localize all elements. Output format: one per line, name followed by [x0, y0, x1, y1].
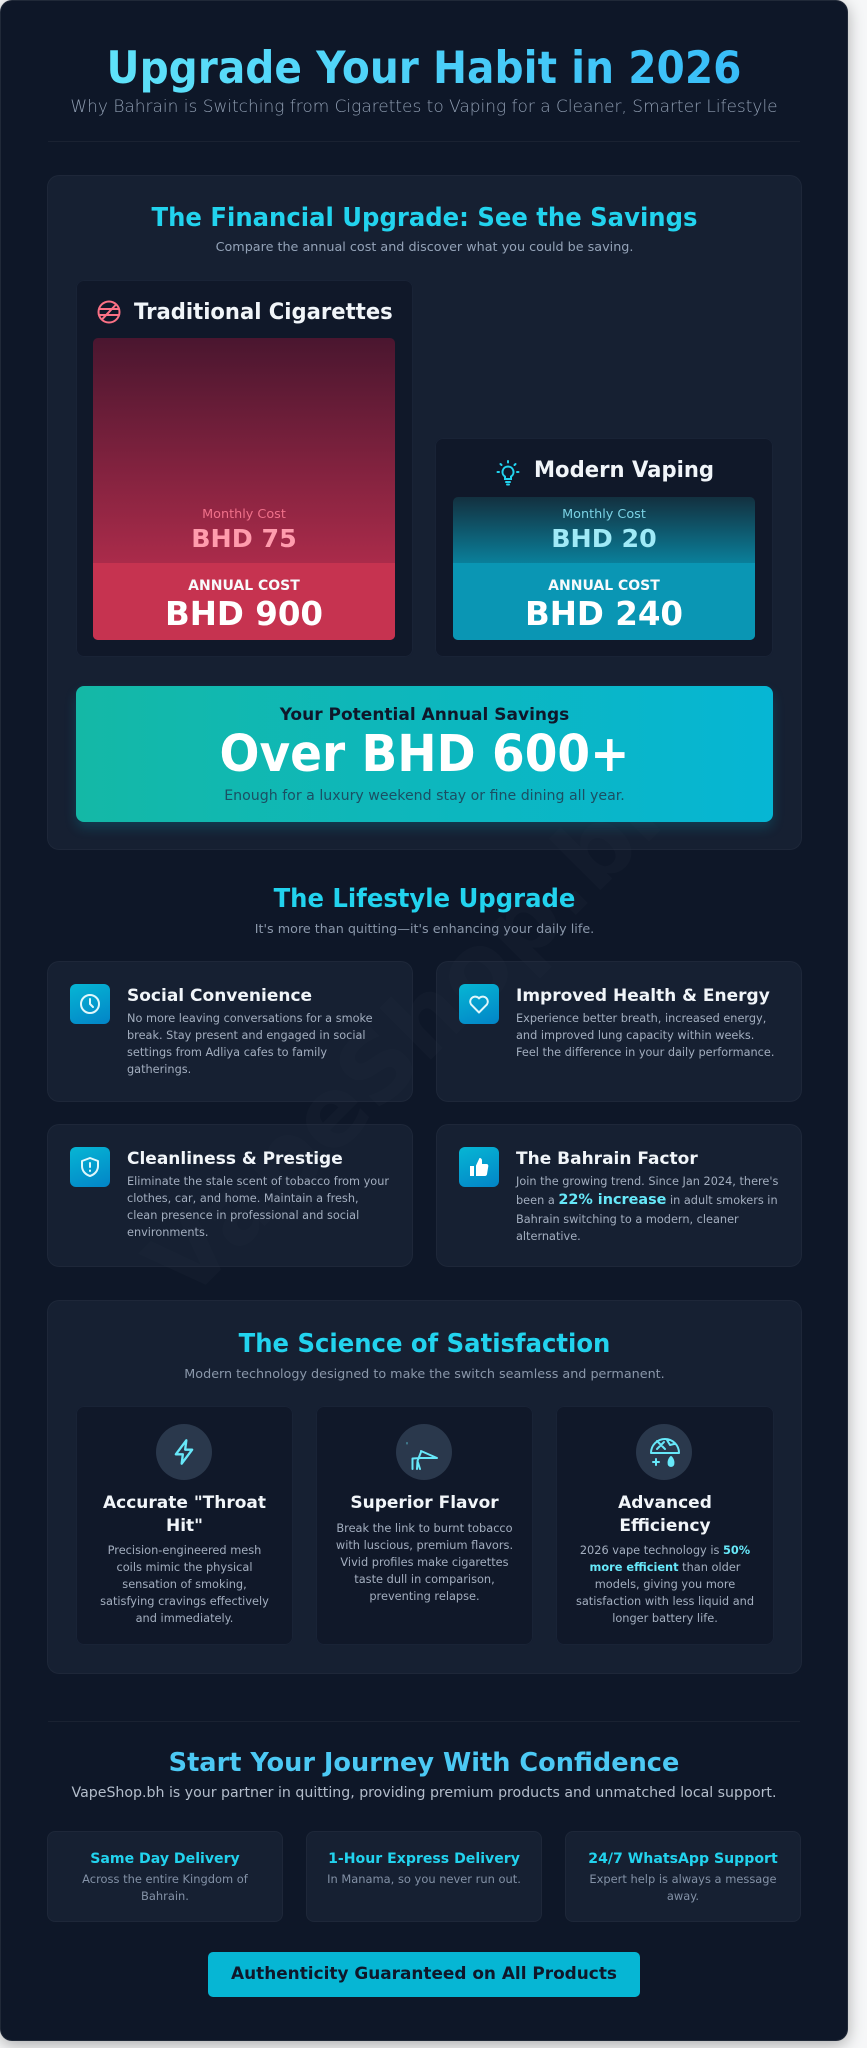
text: cleanliness: environments. — [127, 1226, 208, 1239]
annual cost: cigarettes: BHD 900 — [165, 595, 323, 633]
annual cost: vaping: BHD 240 — [525, 595, 683, 633]
savings amount: Over BHD 600+ — [220, 724, 629, 784]
science card: superior flavor — [316, 1406, 533, 1645]
feature: cleanliness — [47, 1124, 413, 1267]
text: throat hit: Precision-engineered mesh — [108, 1543, 261, 1557]
annual cost: vaping: ANNUAL COST — [548, 578, 660, 594]
icon: no smoking — [98, 300, 120, 324]
watermark: VapeShop.bh — [124, 736, 708, 1320]
text: improved health: Experience better breath, increased energy, — [516, 1012, 766, 1025]
service description — [82, 1872, 248, 1903]
heading: superior flavor: Superior Flavor — [350, 1493, 499, 1513]
button: authenticity guaranteed: Authenticity Guaranteed on All Products — [231, 1963, 617, 1983]
icon: clock — [70, 984, 110, 1024]
text: superior flavor — [336, 1521, 513, 1603]
service: express delivery — [306, 1831, 542, 1922]
service description: In Manama, so you never run out. — [327, 1872, 521, 1886]
text: bahrain factor: been a 22% increase in adult smokers in — [516, 1192, 778, 1208]
service description: Across the entire Kingdom of — [82, 1872, 248, 1886]
monthly cost: cigarettes — [191, 507, 297, 553]
text: cleanliness — [127, 1175, 389, 1239]
text: superior flavor: preventing relapse. — [369, 1589, 480, 1603]
section intro: financial: Compare the annual cost and discover what you could be saving. — [216, 240, 633, 255]
annual cost: cigarettes — [93, 563, 395, 640]
icon: heart — [459, 984, 499, 1024]
icon: shield — [70, 1147, 110, 1187]
header — [48, 40, 800, 142]
text: superior flavor: Break the link to burnt tobacco — [336, 1521, 513, 1535]
feature: social convenience — [47, 961, 413, 1102]
icon: flavor — [396, 1424, 452, 1480]
title: Upgrade Your Habit in 2026 — [107, 41, 741, 94]
comparison: traditional cigarettes — [76, 280, 413, 657]
comparison: modern vaping — [435, 438, 773, 657]
section heading: lifestyle: The Lifestyle Upgrade — [274, 884, 575, 914]
heading: modern vaping: Modern Vaping — [534, 457, 714, 483]
heading: improved health: Improved Health & Energy — [516, 986, 770, 1006]
section heading: science: The Science of Satisfaction — [239, 1329, 610, 1359]
text: advanced efficiency: longer battery life. — [612, 1611, 718, 1625]
text: cleanliness: clothes, car, and home. Maintain a fresh, — [127, 1192, 359, 1205]
text: social convenience — [127, 1012, 373, 1076]
heading: advanced efficiency — [618, 1493, 712, 1536]
text: superior flavor: taste dull in comparison, — [354, 1572, 495, 1586]
text: improved health — [516, 1012, 774, 1059]
text: advanced efficiency: 2026 vape technology is 50% — [580, 1543, 750, 1557]
text: superior flavor: with luscious, premium flavors. — [336, 1538, 513, 1552]
cta intro: VapeShop.bh is your partner in quitting, providing premium products and unmatched local support. — [72, 1785, 776, 1801]
icon: thumbs up — [459, 1147, 499, 1187]
service description: away. — [667, 1889, 699, 1903]
section heading: financial: The Financial Upgrade: See the Savings — [152, 203, 697, 233]
monthly cost: cigarettes: Monthly Cost — [202, 507, 286, 522]
cost bar: cigarettes — [93, 338, 395, 640]
text: social convenience: settings from Adliya cafes to family — [127, 1046, 327, 1059]
text: social convenience: gatherings. — [127, 1063, 191, 1076]
icon: lightning bolt — [156, 1424, 212, 1480]
text: improved health: Feel the difference in your daily performance. — [516, 1046, 774, 1059]
section intro: lifestyle: It's more than quitting—it's enhancing your daily life. — [255, 922, 594, 937]
heading: advanced efficiency: Advanced — [618, 1493, 712, 1513]
savings label: Your Potential Annual Savings — [280, 705, 569, 725]
heading: bahrain factor: The Bahrain Factor — [516, 1149, 698, 1169]
heading: throat hit — [103, 1493, 266, 1536]
service: same day delivery — [47, 1831, 283, 1922]
text: throat hit — [100, 1543, 269, 1625]
service description — [589, 1872, 777, 1903]
heading: social convenience: Social Convenience — [127, 986, 312, 1006]
monthly cost: vaping — [551, 507, 657, 553]
cta heading: Start Your Journey With Confidence — [169, 1748, 679, 1778]
panel: science of satisfaction — [47, 1300, 802, 1674]
text: superior flavor: Vivid profiles make cigarettes — [340, 1555, 509, 1569]
text: advanced efficiency: more efficient than older — [590, 1560, 740, 1574]
panel: financial upgrade — [47, 175, 802, 850]
text: cleanliness: Eliminate the stale scent of tobacco from your — [127, 1175, 389, 1188]
icon: gauge — [636, 1424, 692, 1480]
heading: traditional cigarettes: Traditional Cigarettes — [134, 299, 393, 325]
text: throat hit: sensation of smoking, — [122, 1577, 247, 1591]
text: improved health: and improved lung capacity within weeks. — [516, 1029, 754, 1042]
science card: throat hit — [76, 1406, 293, 1645]
text: throat hit: coils mimic the physical — [116, 1560, 252, 1574]
heading: throat hit: Accurate "Throat — [103, 1493, 266, 1513]
heading: advanced efficiency: Efficiency — [619, 1516, 711, 1536]
subtitle: Why Bahrain is Switching from Cigarettes to Vaping for a Cleaner, Smarter Lifestyle — [70, 96, 778, 116]
service description: Bahrain. — [141, 1889, 189, 1903]
text: advanced efficiency: satisfaction with less liquid and — [576, 1594, 754, 1608]
monthly cost: vaping: BHD 20 — [551, 524, 657, 553]
service description: Expert help is always a message — [589, 1872, 777, 1886]
heading: throat hit: Hit" — [166, 1516, 203, 1536]
monthly cost: cigarettes: BHD 75 — [191, 524, 297, 553]
service title: Same Day Delivery — [90, 1851, 240, 1867]
text: bahrain factor: alternative. — [516, 1230, 581, 1243]
annual cost: vaping — [453, 563, 755, 640]
heading: cleanliness: Cleanliness & Prestige — [127, 1149, 343, 1169]
text: bahrain factor — [515, 1175, 778, 1243]
cost bar: vaping — [453, 497, 755, 640]
science card: advanced efficiency — [556, 1406, 774, 1645]
button: authenticity guaranteed — [208, 1952, 640, 1997]
section intro: science: Modern technology designed to make the switch seamless and permanent. — [184, 1367, 665, 1382]
text: advanced efficiency: models, giving you more — [595, 1577, 735, 1591]
text: advanced efficiency — [576, 1543, 754, 1625]
monthly cost: vaping: Monthly Cost — [562, 507, 646, 522]
feature: bahrain factor — [436, 1124, 802, 1267]
feature: improved health — [436, 961, 802, 1102]
service title: 1-Hour Express Delivery — [328, 1851, 520, 1867]
text: social convenience: No more leaving conversations for a smoke — [127, 1012, 373, 1025]
text: cleanliness: clean presence in professional and social — [127, 1209, 359, 1222]
icon: light bulb — [496, 460, 520, 486]
text: throat hit: satisfying cravings effectively — [100, 1594, 269, 1608]
service title: 24/7 WhatsApp Support — [588, 1851, 778, 1867]
text: social convenience: break. Stay present and engaged in social — [127, 1029, 366, 1042]
savings note: Enough for a luxury weekend stay or fine dining all year. — [224, 788, 625, 804]
annual cost: cigarettes: ANNUAL COST — [188, 578, 300, 594]
footer section: journey — [48, 1721, 800, 2001]
service: whatsapp support — [565, 1831, 801, 1922]
callout: potential savings — [76, 686, 773, 822]
text: bahrain factor: Bahrain switching to a modern, cleaner — [516, 1213, 739, 1226]
text: throat hit: and immediately. — [136, 1611, 233, 1625]
text: bahrain factor: Join the growing trend. Since Jan 2024, there's — [516, 1175, 778, 1188]
